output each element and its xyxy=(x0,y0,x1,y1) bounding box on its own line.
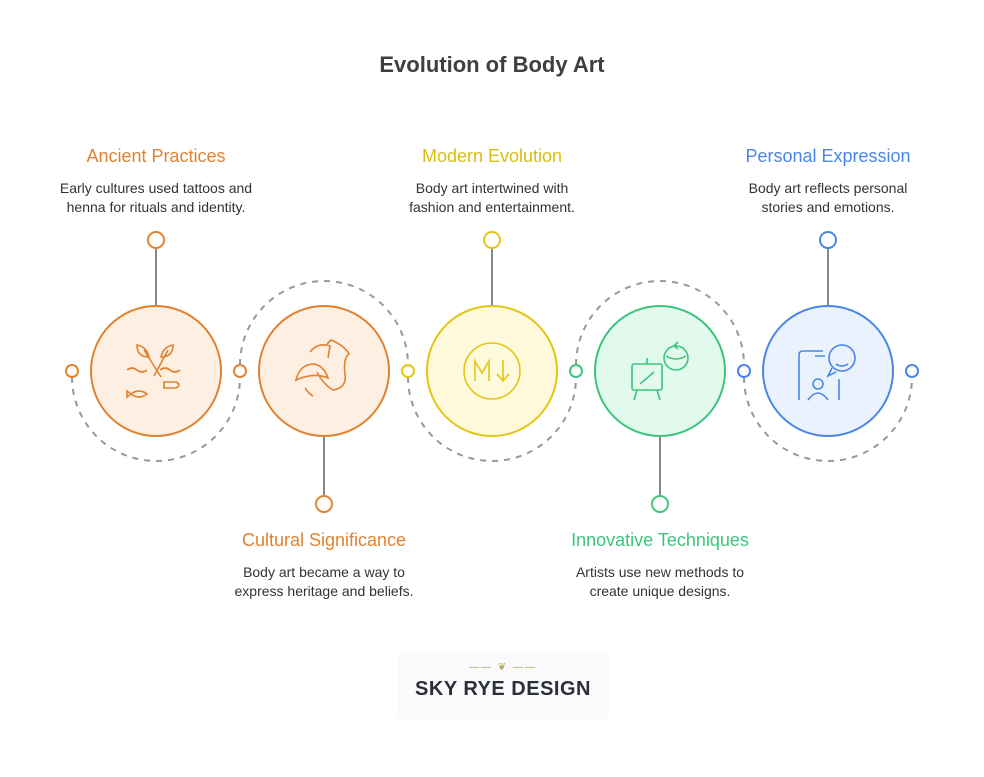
text: ancient practices: Early cultures used tattoos and henna for rituals and identity. xyxy=(60,180,252,215)
text: personal expression: Body art reflects personal stories and emotions. xyxy=(749,180,907,215)
logo: SKY RYE DESIGN xyxy=(415,678,591,700)
text: cultural significance: Cultural Significance xyxy=(242,530,406,550)
icon: leaves and fish xyxy=(127,345,180,397)
icon: easel xyxy=(632,342,688,400)
text: innovative techniques: Artists use new methods to create unique designs. xyxy=(576,564,744,599)
node: ancient practices xyxy=(66,232,221,436)
text: personal expression xyxy=(745,146,911,215)
icon: phone with smiley xyxy=(799,345,855,400)
icon: markdown xyxy=(464,343,520,399)
logo: —— ❦ —— xyxy=(469,662,537,673)
text: modern evolution xyxy=(409,146,575,215)
node: cultural significance xyxy=(234,306,389,512)
text: personal expression: Personal Expression xyxy=(745,146,911,166)
node: modern evolution xyxy=(402,232,557,436)
icon: koi fish xyxy=(296,340,349,396)
logo xyxy=(397,653,609,719)
node: personal expression xyxy=(738,232,918,436)
text: modern evolution: Modern Evolution xyxy=(422,146,562,166)
text: cultural significance: Body art became a way to express heritage and beliefs. xyxy=(234,564,414,599)
text: cultural significance xyxy=(234,530,414,599)
text: innovative techniques: Innovative Techniques xyxy=(571,530,749,550)
text: ancient practices xyxy=(60,146,252,215)
text: modern evolution: Body art intertwined with fashion and entertainment. xyxy=(409,180,575,215)
title: Evolution of Body Art xyxy=(379,52,605,77)
text: innovative techniques xyxy=(571,530,749,599)
text: ancient practices: Ancient Practices xyxy=(86,146,226,166)
node: innovative techniques xyxy=(570,306,725,512)
